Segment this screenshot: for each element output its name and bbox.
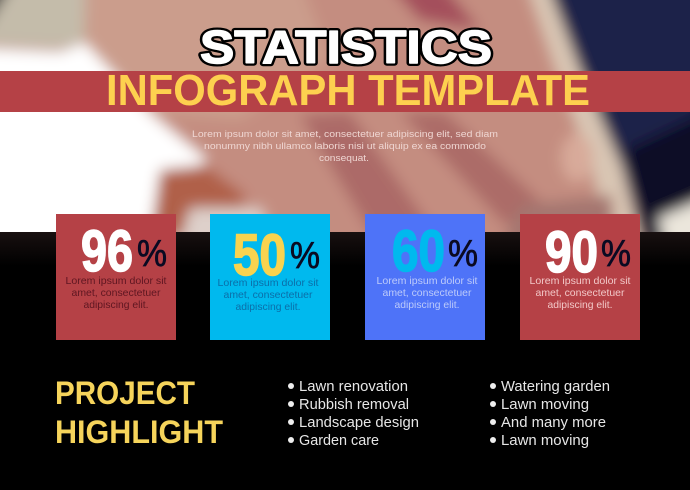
dark reflection strip: [0, 232, 690, 266]
subtitle: infograph template: INFOGRAPH TEMPLATE: [106, 66, 590, 115]
card: 90 percent: amet, consectetuer: [536, 288, 625, 299]
card: 96 percent: %: [137, 233, 167, 274]
list: services column one: Landscape design: [299, 415, 419, 431]
intro text: [192, 129, 498, 164]
title: statistics: STATISTICS: [200, 21, 492, 73]
intro text: Lorem ipsum dolor sit amet, consectetuer adipiscing elit, sed diam: [192, 129, 498, 140]
intro text: nonummy nibh ullamco laboris nisi ut aliquip ex ea commodo: [204, 141, 486, 152]
card: 60 percent: adipiscing elit.: [394, 300, 460, 311]
heading: project highlight: HIGHLIGHT: [55, 414, 223, 450]
list: services column one: Garden care: [299, 433, 379, 449]
intro text: consequat.: [319, 153, 369, 164]
card: 50 percent: 50: [233, 223, 286, 288]
card: 60 percent: [365, 214, 485, 340]
card: 96 percent: 96: [81, 219, 133, 284]
title band: [0, 66, 690, 115]
card: 60 percent: amet, consectetuer: [382, 288, 472, 299]
list: services column two: And many more: [501, 415, 606, 431]
list: services column one: Rubbish removal: [299, 397, 409, 413]
card: 96 percent: Lorem ipsum dolor sit: [66, 276, 167, 287]
list: services column two: [490, 379, 610, 449]
card: 90 percent: [520, 214, 640, 340]
list: services column two: Watering garden: [501, 379, 610, 395]
card: 90 percent: 90: [545, 220, 598, 285]
card: 96 percent: [56, 214, 176, 340]
list: services column one: [288, 379, 419, 449]
card: 50 percent: %: [290, 235, 320, 276]
card: 60 percent: 60: [392, 219, 445, 284]
background photo: handshake: [0, 0, 690, 254]
title: statistics: STATISTICS: [200, 21, 492, 73]
list: services column one: Lawn renovation: [299, 379, 408, 395]
card: 50 percent: adipiscing elit.: [236, 302, 300, 313]
card: 90 percent: adipiscing elit.: [548, 300, 612, 311]
card: 60 percent: Lorem ipsum dolor sit: [376, 276, 478, 287]
heading: project highlight: PROJECT: [55, 375, 195, 411]
card: 50 percent: [210, 214, 330, 340]
card: 50 percent: amet, consectetuer: [224, 290, 313, 301]
card: 90 percent: Lorem ipsum dolor sit: [530, 276, 631, 287]
card: 96 percent: adipiscing elit.: [84, 300, 148, 311]
list: services column two: Lawn moving: [501, 397, 589, 413]
list: services column two: Lawn moving: [501, 433, 589, 449]
card: 96 percent: amet, consectetuer: [72, 288, 161, 299]
heading: project highlight: [55, 375, 223, 450]
card: 60 percent: %: [448, 233, 478, 274]
card: 90 percent: %: [601, 233, 631, 274]
card: 50 percent: Lorem ipsum dolor sit: [218, 278, 319, 289]
